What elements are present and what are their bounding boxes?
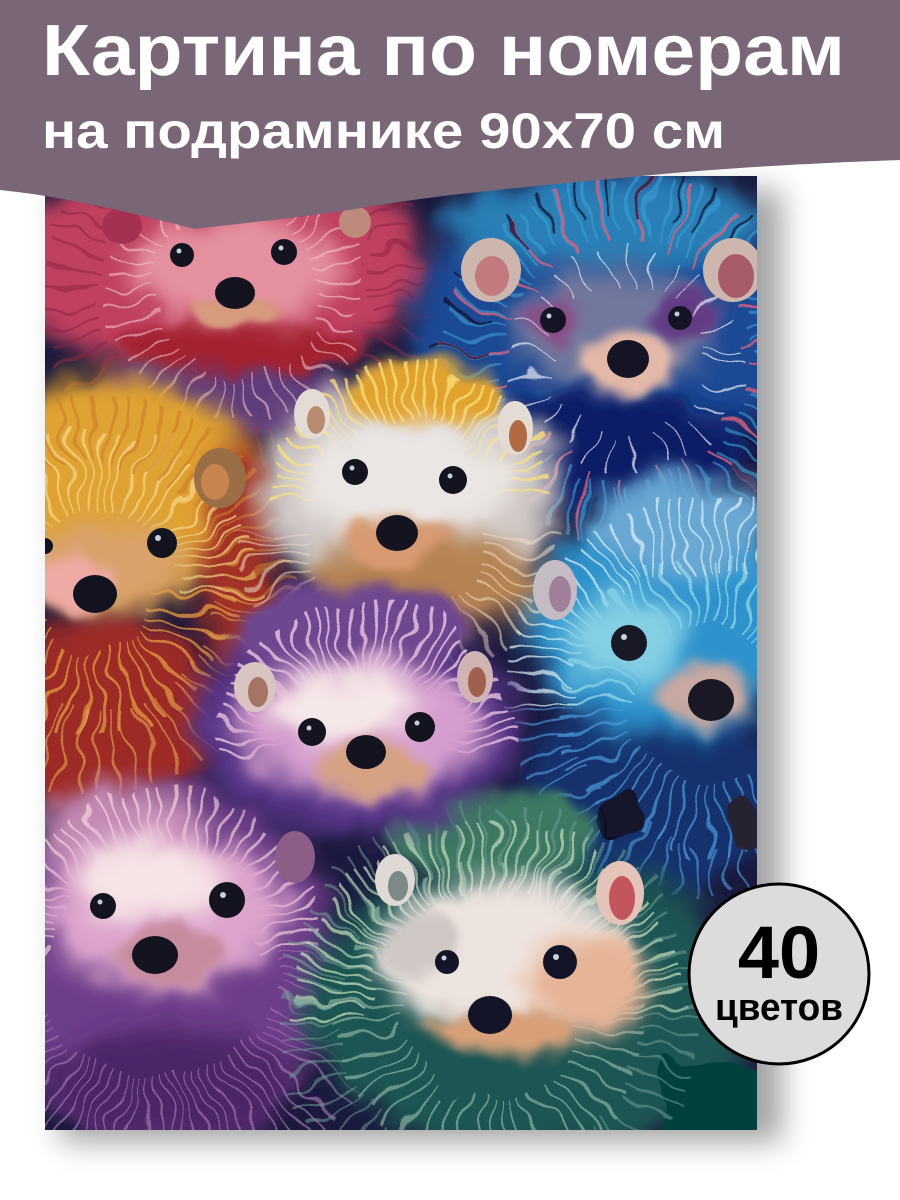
face: purple centre hedgehog bbox=[234, 651, 493, 769]
face: pink hedgehog bbox=[102, 206, 371, 309]
title: Картина по номерам bbox=[42, 11, 845, 91]
face: white hedgehog bbox=[294, 389, 533, 551]
face: green hedgehog bbox=[375, 854, 644, 1034]
fur: green hedgehog bbox=[279, 782, 757, 1130]
badge: 40 colours bbox=[689, 884, 869, 1064]
painting: eight colourful hedgehogs bbox=[45, 176, 757, 1130]
face: blue top-right hedgehog bbox=[461, 238, 763, 378]
badge: 40 colours: цветов bbox=[715, 987, 843, 1029]
subtitle: на подрамнике 90х70 см bbox=[42, 103, 725, 159]
painted fur layer bbox=[45, 176, 757, 1130]
fur: purple lower-left hedgehog bbox=[0, 785, 340, 1145]
fur: purple centre hedgehog bbox=[190, 584, 520, 835]
face: purple lower-left hedgehog bbox=[90, 831, 315, 974]
faces: ears, eyes and noses bbox=[37, 206, 763, 1034]
fur: white hedgehog with yellow crest bbox=[258, 359, 558, 658]
fur: yellow and red hedgehog bbox=[0, 375, 280, 820]
fur: blue right hedgehog bbox=[504, 443, 757, 900]
banner bbox=[0, 0, 900, 229]
fur: pink hedgehog bbox=[45, 196, 444, 471]
badge: 40 colours: 40 bbox=[738, 911, 820, 994]
canvas shadow bbox=[60, 190, 782, 1142]
fur: blue top-right hedgehog bbox=[410, 170, 798, 530]
face: yellow hedgehog bbox=[37, 448, 246, 613]
face: blue right hedgehog bbox=[533, 560, 734, 721]
